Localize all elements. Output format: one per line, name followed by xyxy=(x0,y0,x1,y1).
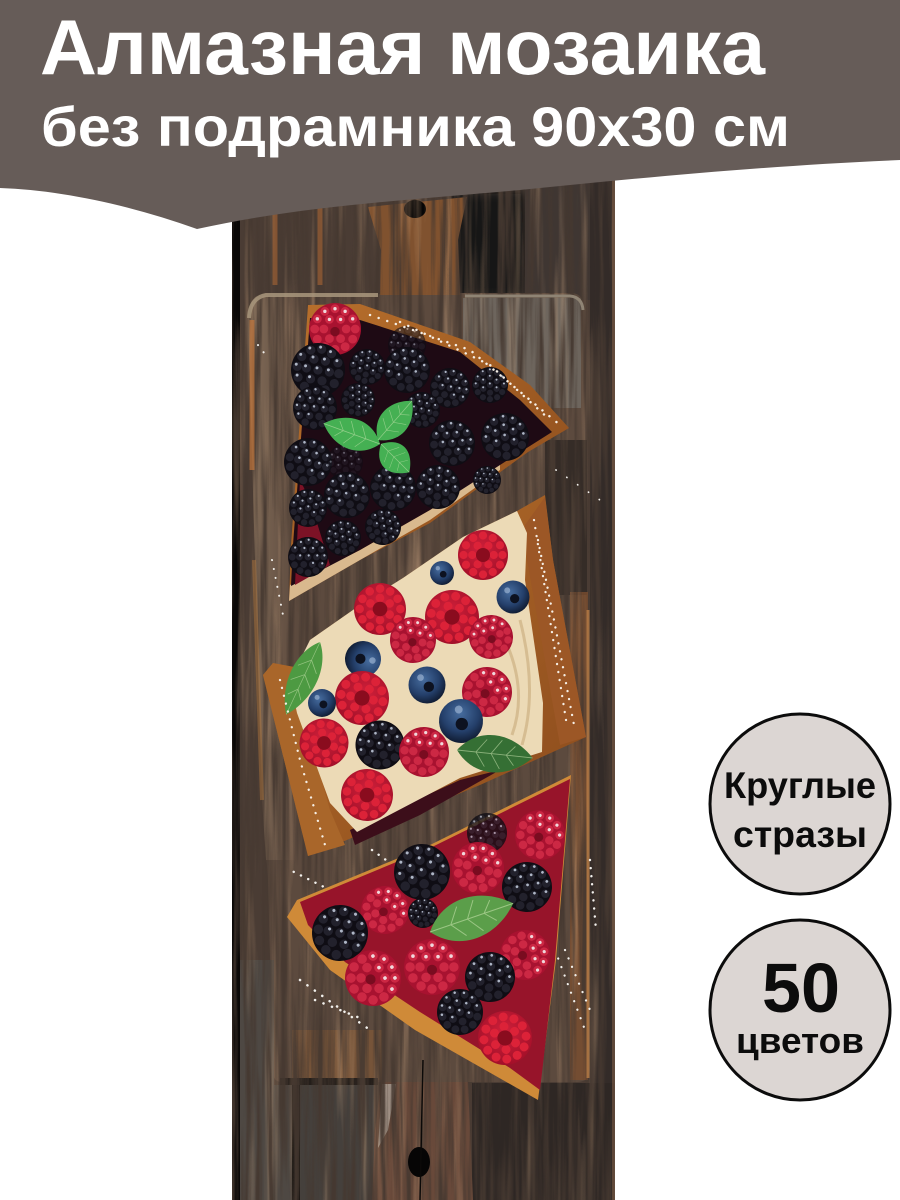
plank background xyxy=(240,190,590,1176)
slice 2 leaf left xyxy=(274,636,333,720)
badge label: цветов xyxy=(736,1020,864,1061)
board left light strip xyxy=(248,297,287,860)
grain overlays xyxy=(232,180,615,1200)
board mid right dark xyxy=(545,440,587,595)
edge highlights xyxy=(249,295,378,318)
slice 1: blackberry tart xyxy=(279,303,569,601)
top dark shadow xyxy=(450,190,530,300)
badge: 50 colours xyxy=(710,920,890,1100)
slice 3 berries xyxy=(304,801,574,1074)
slice 2 jam edge xyxy=(350,770,500,845)
slice 2 sugar xyxy=(280,520,574,845)
badge text line 1: Круглые xyxy=(724,765,876,806)
board right warm edge xyxy=(570,592,588,1080)
slice 3: red berry tart xyxy=(287,775,574,1100)
board top right grey xyxy=(463,298,581,408)
top handle xyxy=(368,197,467,295)
slice 2 berries xyxy=(293,530,530,832)
slice 1 red jam xyxy=(295,480,330,585)
slice 2 leaf right xyxy=(455,731,535,776)
white handle edge xyxy=(378,1084,396,1148)
slice 1 sugar on crust xyxy=(370,315,560,425)
slice 2 right crust highlight xyxy=(525,497,586,745)
scattered sugar on board xyxy=(258,345,600,1030)
cutting board body xyxy=(248,293,590,1082)
slice 1 crust lower pale edge xyxy=(289,462,500,601)
header ribbon xyxy=(0,0,900,229)
bottom handle hole xyxy=(408,1147,430,1177)
slice 2 cream swirl xyxy=(505,620,530,745)
right planks xyxy=(590,181,615,1083)
slice 1 mint xyxy=(318,391,423,482)
bottom handle xyxy=(372,1082,473,1200)
slice 1 blackberries xyxy=(279,324,537,584)
badge text line 2: стразы xyxy=(733,814,867,855)
slice 2 crust xyxy=(263,495,586,856)
slice 1 crust xyxy=(289,304,569,601)
title line 2: без подрамника 90х30 см xyxy=(41,95,790,158)
bottom dark cutout xyxy=(292,1084,374,1200)
title xyxy=(40,3,790,158)
board lower warm area xyxy=(292,1030,382,1080)
slice 3 crust xyxy=(287,775,571,1100)
wooden board photo panel xyxy=(232,180,615,1200)
badge: round rhinestones xyxy=(710,714,890,894)
bottom right wood xyxy=(472,1083,590,1200)
slice 3 red jam xyxy=(300,779,570,1090)
title line 1: Алмазная мозаика xyxy=(40,3,766,91)
top handle hole xyxy=(404,200,426,218)
slice 2 left crust xyxy=(263,663,345,856)
slice 2: cream tart xyxy=(263,495,586,856)
plank dark edge left xyxy=(232,180,240,1200)
slice 3 leaf xyxy=(423,884,520,952)
badge number: 50 xyxy=(762,949,840,1027)
slice 2 cream xyxy=(290,511,543,832)
slice 1 raspberry xyxy=(309,303,361,355)
slice 1 dark filling xyxy=(291,318,552,586)
bottom left plank xyxy=(240,960,274,1085)
top right plank xyxy=(525,180,590,300)
